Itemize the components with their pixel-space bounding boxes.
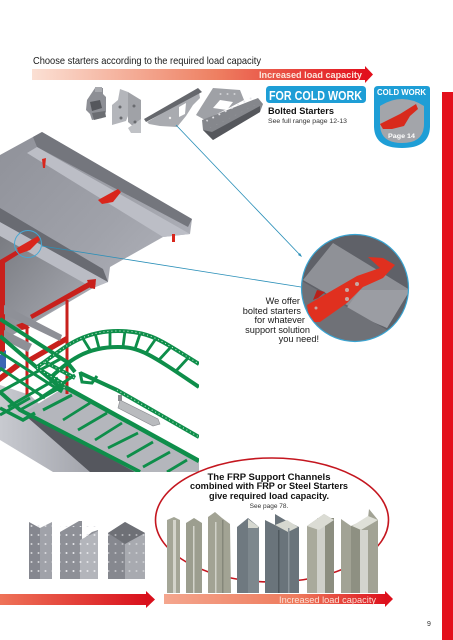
text: bolted starters: See full range page 12-13	[268, 118, 348, 125]
starters on ceiling	[42, 158, 46, 168]
arrow head on connector	[298, 253, 302, 257]
curved tray	[37, 331, 199, 367]
badge: cold work shield: Page 14	[388, 133, 415, 140]
icon: angle bracket starter	[112, 89, 141, 133]
icons: bolted starter products	[86, 87, 263, 140]
steel channels	[29, 521, 145, 579]
arrow: bottom right increased load capacity: Increased load capacity	[279, 595, 377, 605]
channel: steel 1	[29, 522, 52, 579]
text: frp support channels: The FRP Support Channels	[208, 471, 330, 482]
text: frp support channels: combined with FRP or Steel Starters	[190, 480, 348, 491]
channel: frp 1	[167, 517, 180, 593]
floor	[0, 385, 90, 472]
text: frp support channels	[190, 471, 348, 510]
icon: long plate starter	[144, 88, 202, 127]
ribs	[33, 132, 192, 227]
icon: large perforated starter	[196, 88, 263, 140]
channel: frp 2	[186, 518, 202, 593]
badge: cold work shield	[374, 86, 430, 148]
channel: steel 3	[108, 522, 145, 579]
illustration: ceiling and cable tray installation	[0, 132, 199, 472]
title: choose starters: Choose starters according to the required load capacity	[33, 55, 262, 67]
icon: clamp starter	[86, 87, 106, 120]
text: we offer bolted starters: We offer	[266, 296, 300, 306]
text: bolted starters	[268, 106, 348, 125]
highlight circle on ceiling	[14, 230, 42, 258]
channel: frp 5	[265, 514, 299, 593]
text: frp support channels: See page 78.	[250, 503, 289, 510]
rungs	[63, 403, 187, 472]
red supports	[0, 250, 96, 397]
badge: cold work shield: COLD WORK	[377, 88, 426, 97]
channel: frp 3	[208, 512, 231, 593]
channel: frp 6	[307, 514, 334, 593]
channel: frp 7	[341, 509, 378, 593]
text: we offer bolted starters: you need!	[279, 334, 319, 344]
text: we offer bolted starters: bolted starters	[243, 306, 301, 316]
connector lines	[42, 125, 301, 287]
page number: 9	[427, 621, 431, 628]
text: we offer bolted starters	[243, 296, 319, 344]
text: we offer bolted starters: for whatever	[254, 315, 305, 325]
rail perforations	[37, 331, 199, 437]
green trays	[0, 319, 199, 472]
red ellipse	[156, 458, 388, 582]
text: bolted starters: Bolted Starters	[268, 106, 334, 116]
lamp	[118, 400, 160, 426]
arrow: bottom right increased load capacity	[164, 591, 393, 607]
pipes	[4, 305, 62, 341]
straight tray rails	[0, 319, 75, 372]
sidebar: red edge strip	[442, 92, 453, 640]
badge: for cold work: FOR COLD WORK	[269, 89, 362, 103]
channel: frp 4	[237, 518, 259, 593]
arrow: top increased load capacity	[32, 66, 373, 83]
upper ceiling panel	[0, 132, 192, 342]
arrow: top increased load capacity: Increased load capacity	[259, 70, 362, 80]
arrow: bottom left	[0, 591, 155, 608]
frp channels	[167, 509, 378, 593]
channel: steel 2	[60, 521, 98, 579]
detail circle: zoomed starter	[300, 234, 410, 345]
ladder floor grey infill	[25, 387, 199, 472]
text: frp support channels: give required load capacity.	[209, 490, 329, 501]
text: we offer bolted starters: support solution	[245, 325, 310, 335]
